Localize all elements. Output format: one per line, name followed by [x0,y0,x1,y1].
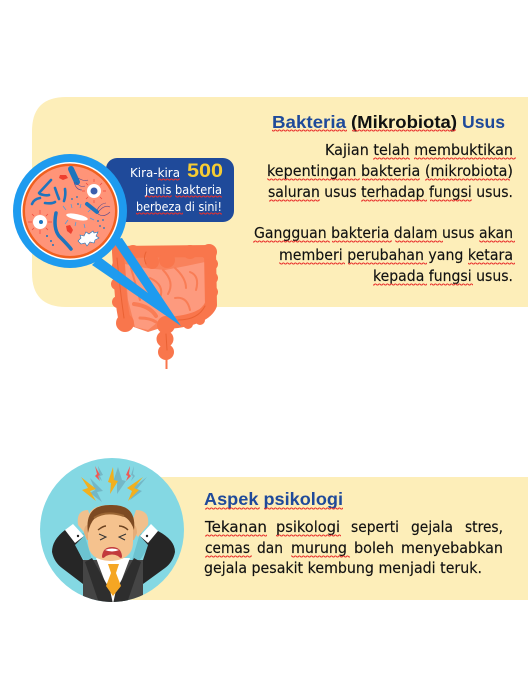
panel: psychology background [100,477,528,600]
text block: psychology description: seperti [351,518,399,536]
text block: psychology description: gejala [411,518,453,536]
lightning bolts [81,466,147,502]
icon: magnifying glass [13,154,181,326]
heading: Bakteria (Mikrobiota) Usus [272,112,505,132]
suit and tie [83,558,143,604]
text block: psychology description: cemas [205,539,250,557]
heading: Bakteria (Mikrobiota) Usus: Usus [462,112,505,132]
background shadow behind head [74,533,150,560]
panel: gut bacteria background [32,97,528,307]
bacteria inside the lens [28,169,110,249]
text block: psychology description: Tekanan [204,518,267,536]
text block: gut bacteria description: kepentingan bakteria (mikrobiota) [267,162,513,180]
icon: stressed man [40,458,184,604]
text block: psychology description: psikologi [276,518,340,536]
text block: psychology description: dan [257,539,283,557]
text block: psychology description: murung [291,539,347,557]
callout: 500 types of bacteria: Kira-kira [130,165,180,180]
callout: 500 types of bacteria: 500 [187,161,223,182]
text block: psychology description: boleh [354,539,394,557]
heading: Bakteria (Mikrobiota) Usus: (Mikrobiota) [351,112,457,132]
arms and hands [52,510,175,584]
text block: psychology description [204,518,503,577]
text block: gut bacteria description: kepada fungsi usus. [373,267,513,285]
callout: 500 types of bacteria [106,158,234,222]
text block: gut bacteria description [253,141,516,286]
text block: psychology description: gejala pesakit kembung menjadi teruk. [204,559,482,577]
heading: Bakteria (Mikrobiota) Usus: Bakteria [272,112,346,132]
callout: 500 types of bacteria: jenis bakteria [144,182,222,197]
head [84,505,137,561]
callout: 500 types of bacteria: berbeza di sini! [136,199,222,214]
text block: gut bacteria description: Kajian telah membuktikan [325,141,513,159]
icon: intestines [111,244,218,369]
text block: psychology description: menyebabkan [401,539,503,557]
text block: gut bacteria description: Gangguan bakteria dalam usus akan [254,224,513,242]
text block: gut bacteria description: memberi perubahan yang ketara [279,246,513,264]
text block: psychology description: stres, [465,518,503,536]
heading: Aspek psikologi: Aspek psikologi [204,489,343,509]
text block: gut bacteria description: saluran usus terhadap fungsi usus. [268,183,513,201]
